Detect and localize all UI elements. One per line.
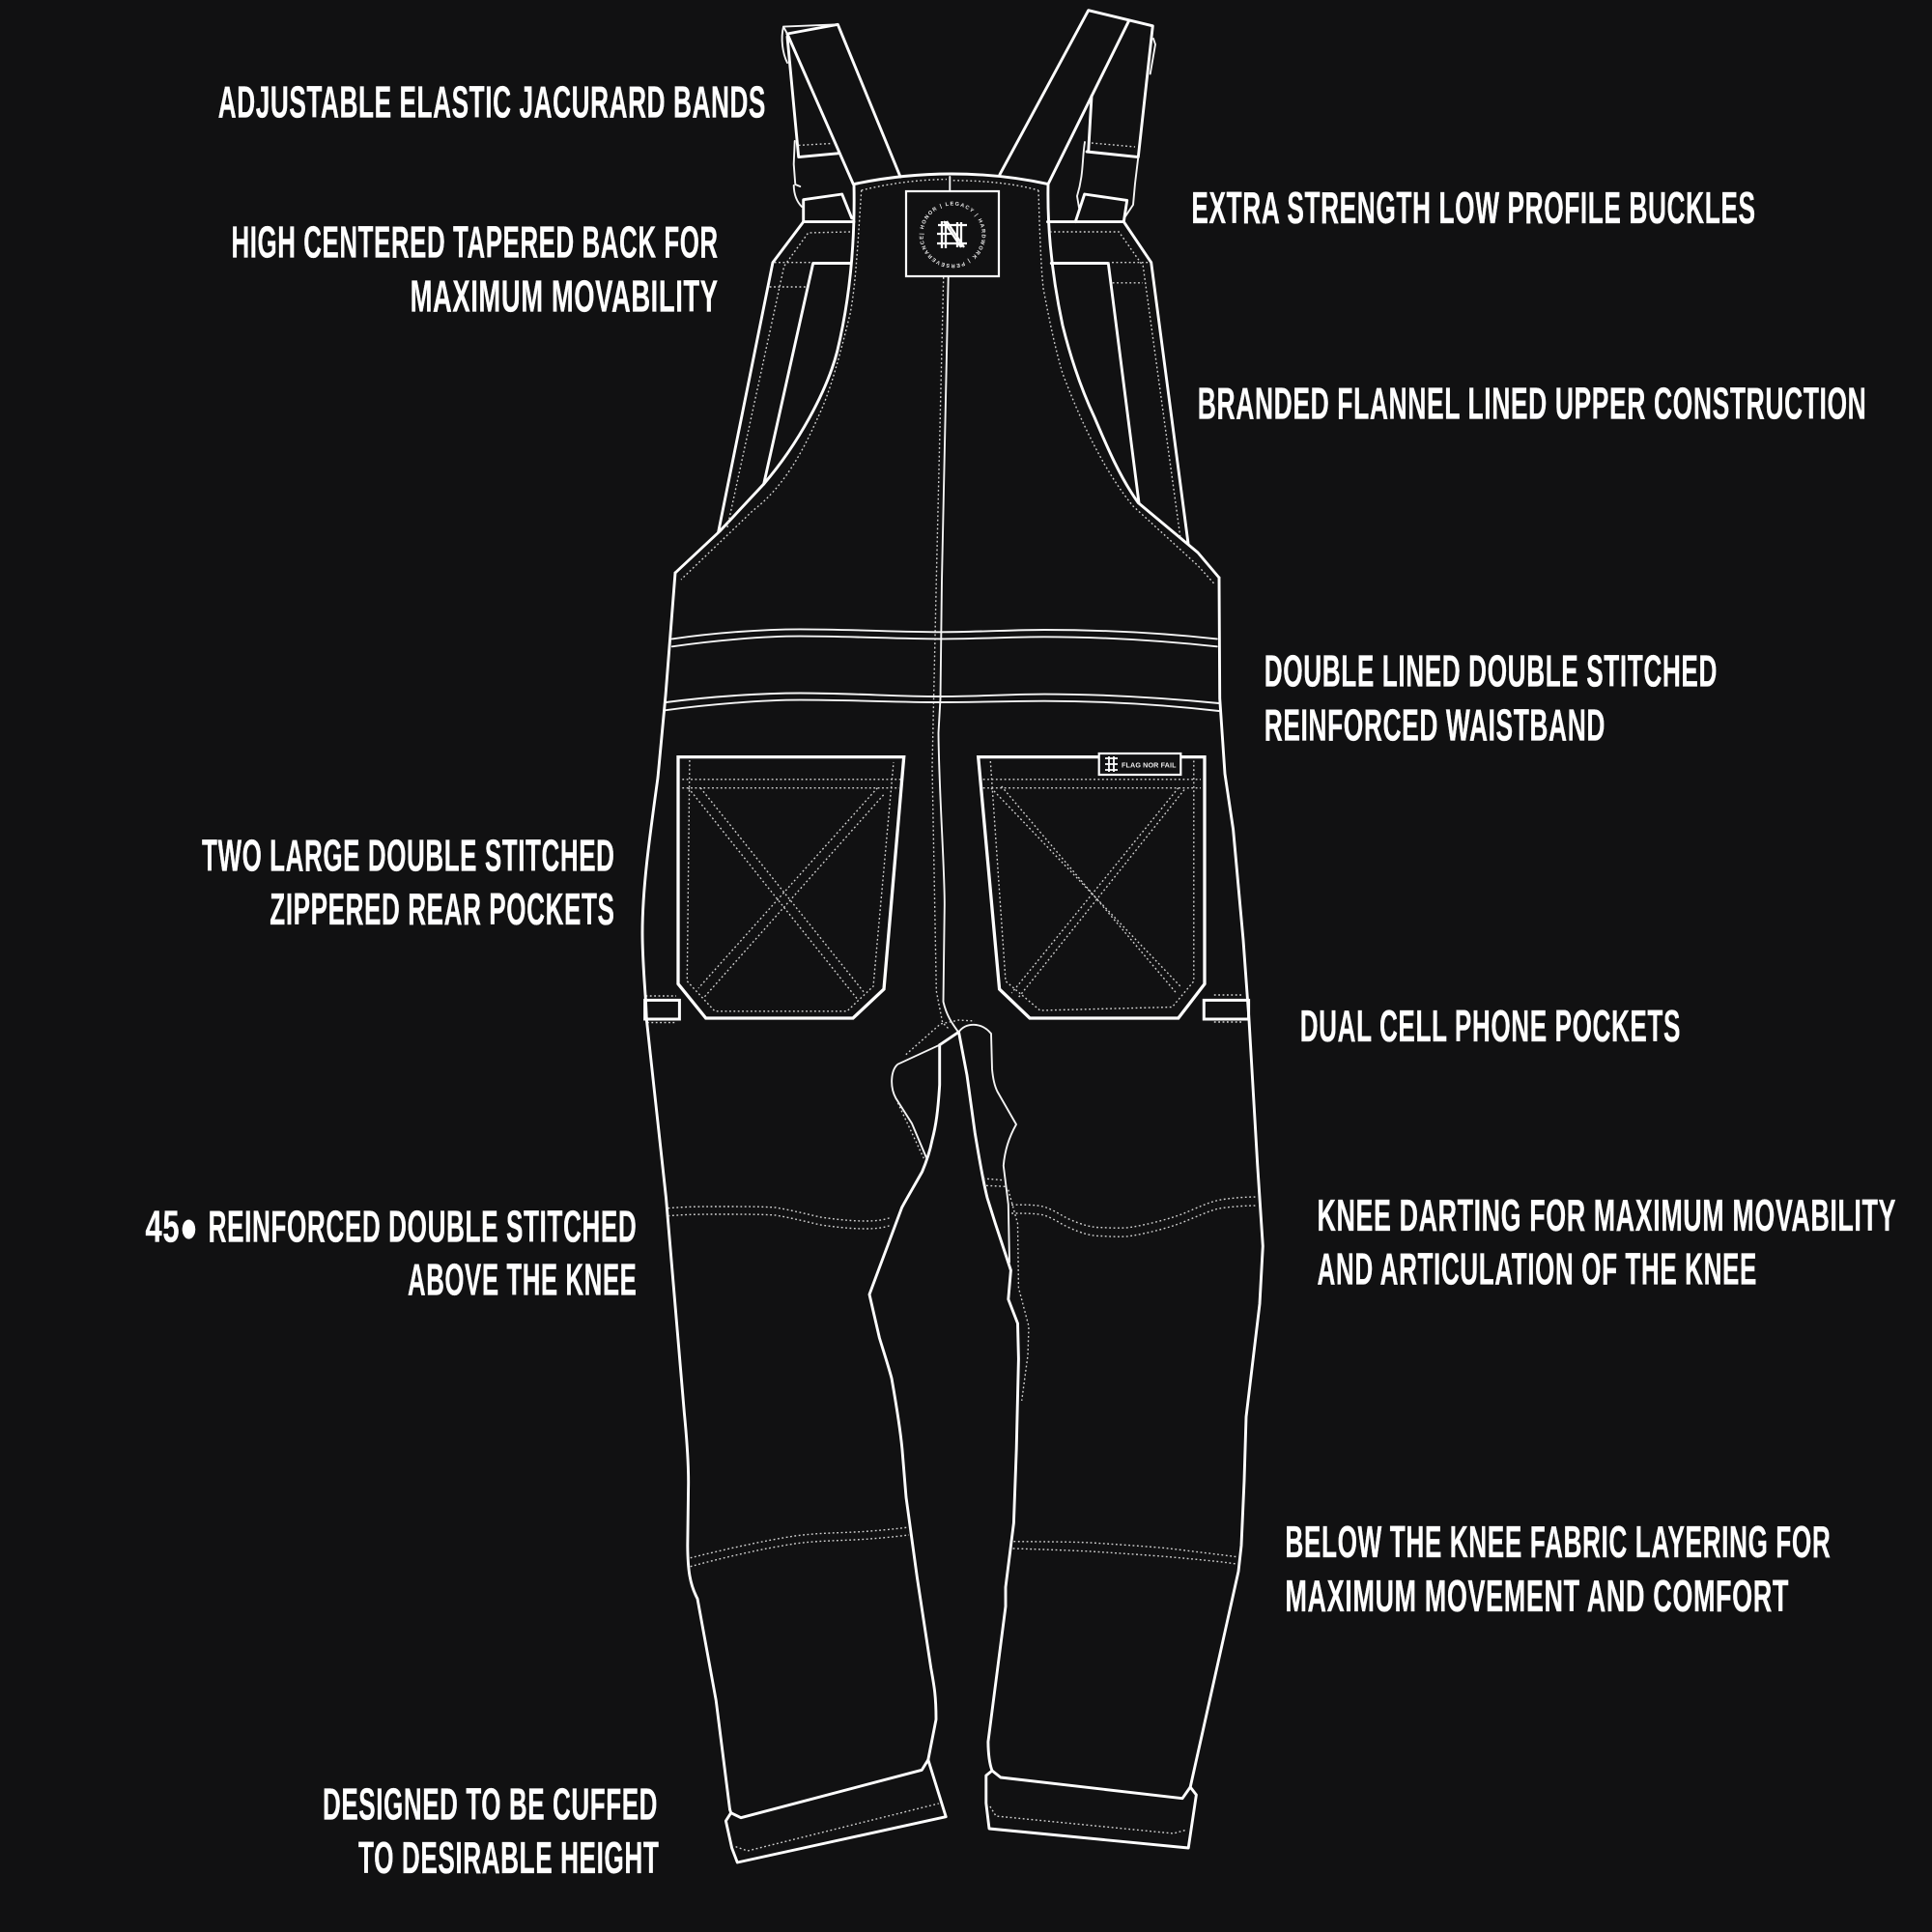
right cell phone pocket <box>1204 995 1249 1022</box>
callout: rear pockets: ZIPPERED REAR POCKETS <box>270 884 614 934</box>
right cuff <box>986 1771 1196 1848</box>
below the knee layering seams <box>691 1527 1237 1567</box>
right rear pocket <box>979 757 1205 1018</box>
right shoulder strap <box>1000 11 1155 185</box>
circular motto: | HONOR | LEGACY | HARDWORK | PERSEVERANCE <box>920 201 985 269</box>
tag text: FLAG NOR FAIL <box>1122 761 1177 769</box>
callout: waistband <box>1264 645 1718 750</box>
waistband lines <box>664 629 1219 711</box>
callout: rear pockets <box>202 831 614 934</box>
bib outline <box>675 174 1219 578</box>
label patch with monogram <box>904 189 1001 278</box>
callout: cuffs: TO DESIRABLE HEIGHT <box>358 1833 659 1883</box>
callout: tapered back <box>232 216 719 321</box>
left cuff <box>725 1760 946 1862</box>
callout: waistband: REINFORCED WAISTBAND <box>1264 699 1605 750</box>
callout: above the knee: ABOVE THE KNEE <box>408 1254 637 1304</box>
left buckle <box>794 141 854 222</box>
monogram <box>937 221 967 248</box>
callout: above the knee <box>145 1202 637 1304</box>
right leg outline <box>958 578 1263 1787</box>
left cell phone pocket <box>645 996 679 1023</box>
callout: rear pockets: TWO LARGE DOUBLE STITCHED <box>202 831 614 881</box>
left rear pocket <box>678 757 904 1018</box>
callout: knee darting <box>1318 1190 1896 1294</box>
bib stitching <box>681 180 1215 584</box>
left leg outline <box>642 573 940 1809</box>
callout: below the knee <box>1285 1517 1831 1621</box>
left shoulder strap <box>782 24 900 185</box>
pocket brand tag <box>1099 753 1180 775</box>
callout: above the knee: REINFORCED DOUBLE STITCHED <box>209 1202 637 1252</box>
crotch gusset <box>892 1020 1029 1401</box>
callout: cuffs <box>323 1779 659 1883</box>
tag monogram <box>1105 756 1118 772</box>
overalls line drawing <box>641 9 1264 1864</box>
side strap panels <box>719 222 1188 544</box>
knee darts <box>668 1197 1258 1236</box>
right buckle <box>1047 142 1138 222</box>
callout: tapered back: HIGH CENTERED TAPERED BACK FOR <box>232 216 719 267</box>
callout: above the knee: 45● <box>145 1202 199 1252</box>
center back seam <box>932 177 958 1033</box>
callout: tapered back: MAXIMUM MOVABILITY <box>411 270 719 321</box>
callout: elastic bands: ADJUSTABLE ELASTIC JACURARD BANDS <box>218 77 766 128</box>
callout: cuffs: DESIGNED TO BE CUFFED <box>323 1779 658 1830</box>
